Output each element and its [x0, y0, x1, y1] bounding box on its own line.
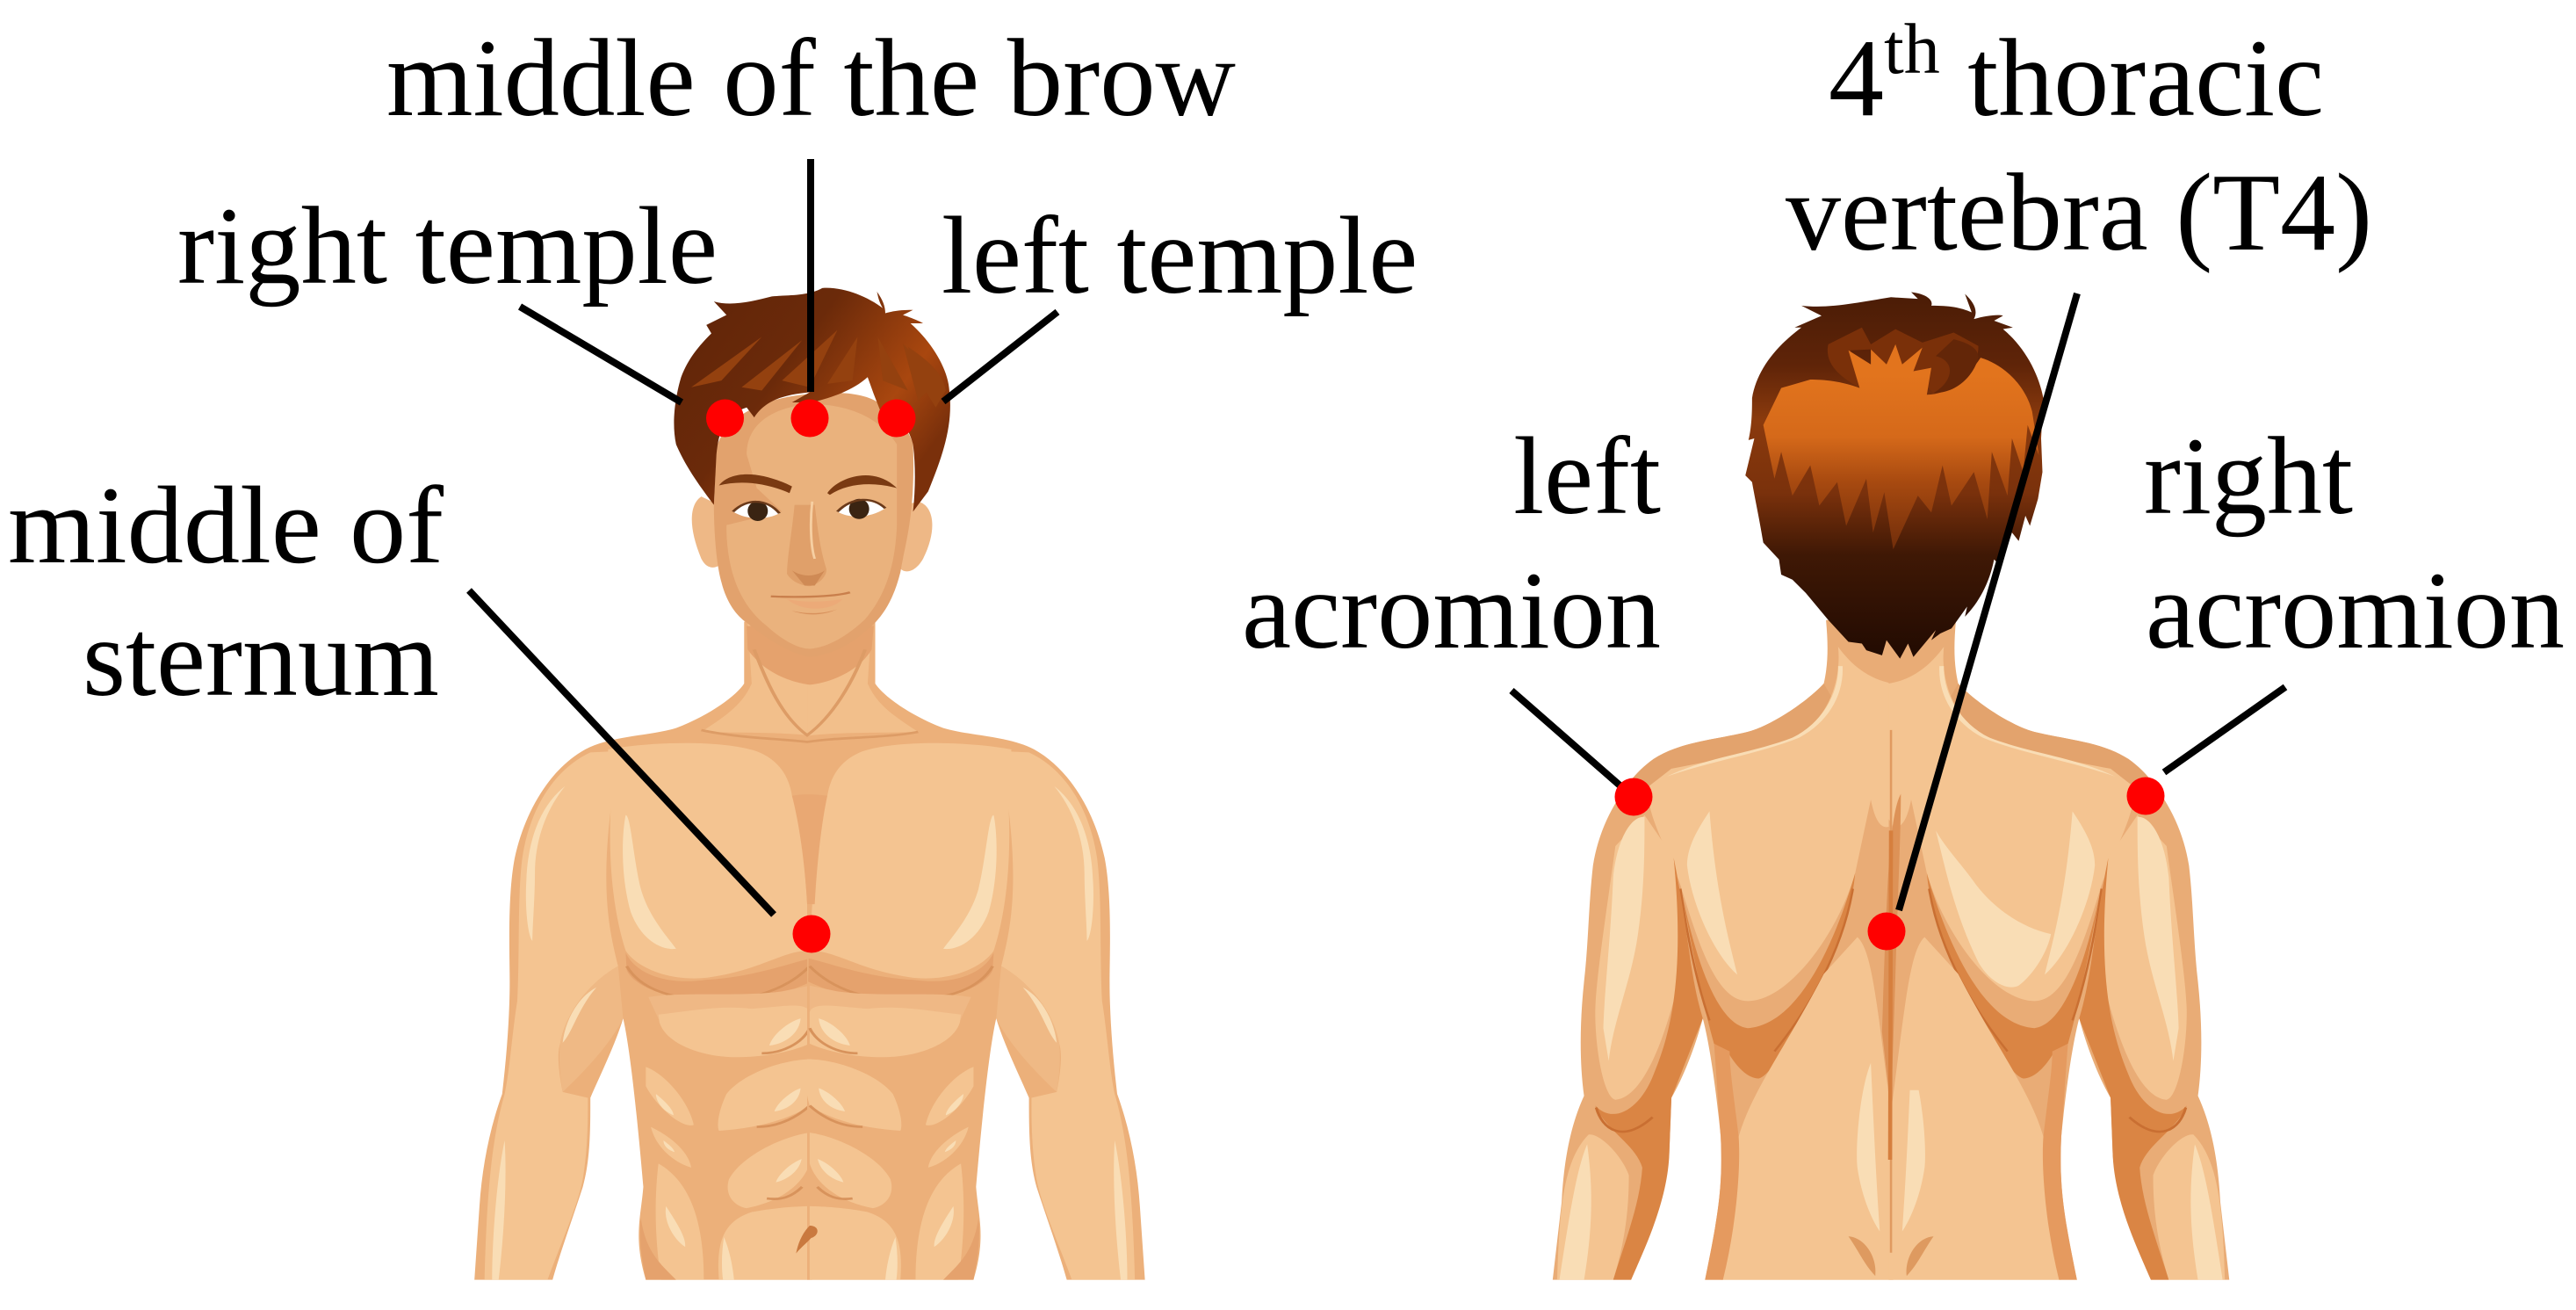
left acromion line — [1512, 691, 1631, 795]
point: right temple — [706, 399, 744, 438]
point: left temple — [878, 399, 915, 438]
ears — [692, 496, 932, 571]
label: right acromion: acromion — [2146, 550, 2565, 672]
neck and head — [674, 288, 950, 742]
label: 4th thoracic vertebra — [1786, 9, 2372, 274]
label: right acromion — [2144, 416, 2565, 672]
back figure — [1512, 293, 2285, 1280]
point: T4 — [1867, 912, 1906, 951]
left temple line — [943, 312, 1057, 402]
point: left acromion — [1614, 778, 1653, 815]
label: right temple: right temple — [177, 185, 718, 308]
label: 4th thoracic vertebra: vertebra (T4) — [1786, 152, 2372, 274]
right temple line — [520, 307, 682, 402]
nose — [787, 505, 826, 586]
right acromion line — [2164, 687, 2285, 772]
eyebrows — [719, 474, 897, 495]
back hair — [1745, 293, 2044, 659]
label: 4th thoracic vertebra: th — [1884, 9, 1940, 89]
label: middle of the brow: middle of the brow — [386, 18, 1236, 140]
front torso and arms — [474, 621, 1145, 1280]
hair — [674, 288, 950, 511]
mouth — [771, 592, 850, 597]
label: middle of sternum — [8, 465, 444, 720]
back torso and arms — [1553, 620, 2229, 1280]
label: middle of sternum: sternum — [83, 597, 439, 720]
label: left temple: left temple — [942, 195, 1418, 317]
label: 4th thoracic vertebra: thoracic — [1940, 18, 2324, 140]
label: 4th thoracic vertebra: 4 — [1829, 18, 1884, 140]
label: middle of sternum: middle of — [8, 465, 444, 587]
brow line — [807, 159, 814, 392]
label: left acromion: acromion — [1242, 550, 1661, 672]
label: left acromion — [1242, 416, 1661, 672]
label: right acromion: right — [2144, 416, 2353, 538]
face — [714, 393, 913, 657]
eyes — [733, 501, 885, 518]
point: middle of sternum — [792, 916, 831, 952]
sternum line — [469, 590, 774, 915]
T4 line — [1899, 293, 2077, 910]
point: middle of the brow — [790, 399, 829, 438]
front figure — [469, 159, 1145, 1280]
hair strands — [691, 330, 946, 408]
point: right acromion — [2127, 777, 2164, 815]
label: left acromion: left — [1513, 416, 1661, 538]
